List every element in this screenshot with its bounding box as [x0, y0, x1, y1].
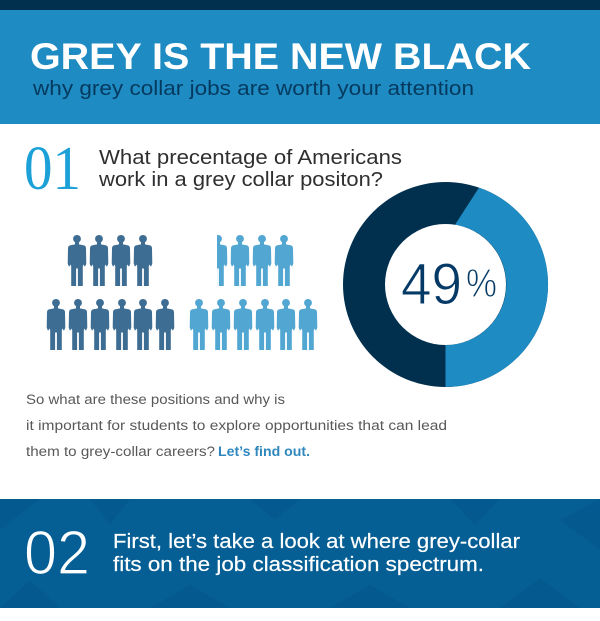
- body text: them to grey-collar careers?: [26, 444, 215, 459]
- section number 01: 01: [24, 135, 81, 203]
- pictogram: light figures: [190, 235, 317, 350]
- header banner: [0, 10, 600, 124]
- section 02 text: First, let’s take a look at where grey-collar: [113, 531, 520, 553]
- donut chart: [343, 182, 548, 387]
- question text: What precentage of Americans: [99, 147, 402, 169]
- body text: So what are these positions and why is: [26, 392, 285, 407]
- question text: work in a grey collar positon?: [98, 169, 383, 191]
- pictogram: dark figures: [47, 235, 174, 350]
- body text: it important for students to explore opportunities that can lead: [26, 418, 447, 433]
- top bar: [0, 0, 600, 10]
- section 02 text: [113, 531, 520, 576]
- section 02 banner: [0, 499, 600, 608]
- question text: [98, 147, 402, 191]
- section number 02: 02: [24, 519, 90, 588]
- body text: [26, 392, 447, 459]
- donut value: 49: [401, 252, 462, 317]
- body text: Let’s find out.: [218, 444, 310, 459]
- donut value: %: [466, 262, 497, 306]
- section 02 text: fits on the job classification spectrum.: [113, 554, 484, 576]
- title: GREY IS THE NEW BLACK: [30, 35, 531, 77]
- donut value: [401, 252, 497, 317]
- subtitle: why grey collar jobs are worth your attention: [32, 78, 474, 100]
